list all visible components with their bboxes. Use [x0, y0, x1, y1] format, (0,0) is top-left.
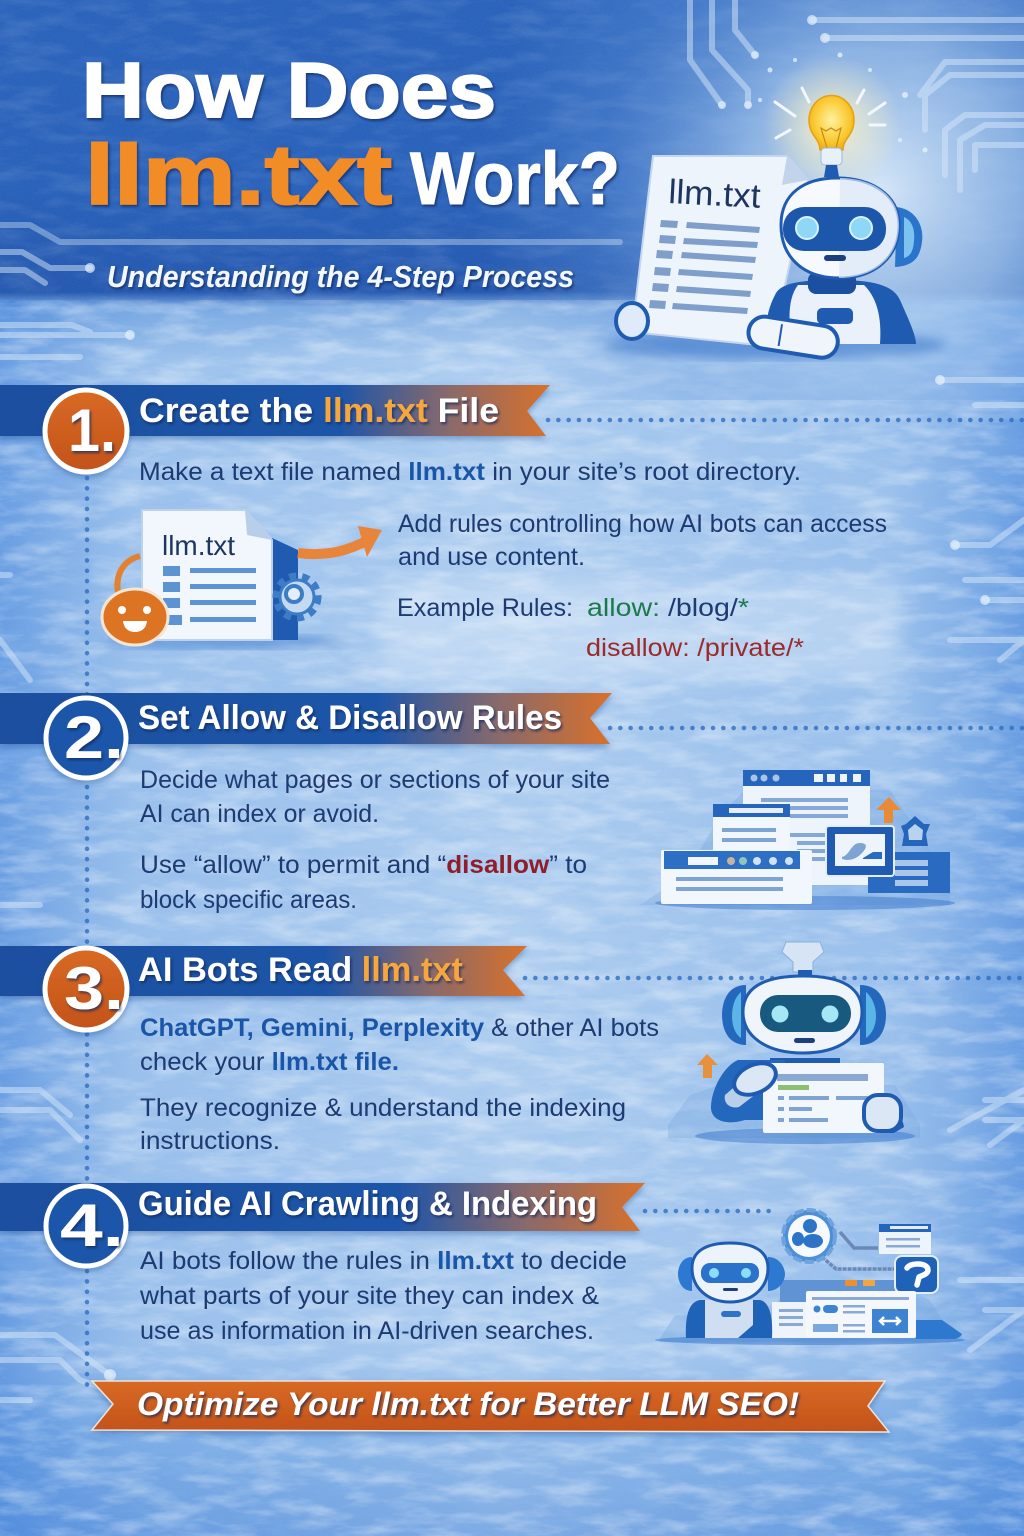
hero illustration: robot with llm.txt document	[605, 52, 945, 360]
robot	[746, 178, 922, 360]
step 4: guide ai crawling and indexing	[0, 1183, 965, 1345]
document: llm.txt	[668, 173, 762, 216]
step 3: ai bots read llm.txt	[0, 942, 1024, 1155]
title: Work?	[410, 137, 620, 220]
subtitle: Understanding the 4-Step Process	[107, 259, 574, 294]
number badge 1	[45, 390, 127, 472]
example rules	[397, 594, 804, 662]
dotted connector	[645, 1209, 770, 1213]
icon: file with gear and arrows: llm.txt	[162, 530, 235, 561]
number badge 4	[46, 1186, 126, 1266]
text: step 2	[140, 766, 610, 914]
banner 4	[0, 1183, 645, 1231]
example rules: disallow: /private/*	[586, 634, 804, 662]
dotted connector	[548, 418, 1024, 422]
example rules: Example Rules:	[397, 594, 573, 622]
number badge 4: 4.	[60, 1192, 124, 1259]
number badge 3	[45, 948, 127, 1030]
text: step 2: block specific areas.	[140, 886, 357, 914]
title	[82, 46, 620, 222]
dotted connector	[525, 976, 1024, 980]
call to action banner	[92, 1381, 889, 1432]
title: llm.txt	[85, 128, 392, 222]
text: step 2: AI can index or avoid.	[140, 800, 379, 828]
example rules: allow: /blog/ *	[587, 594, 749, 622]
call to action banner: Optimize Your llm.txt for Better LLM SEO!	[137, 1386, 799, 1422]
number badge 2	[46, 698, 126, 778]
text: rules: Add rules controlling how AI bots can access	[398, 510, 887, 538]
banner 1	[0, 385, 550, 436]
banner 3: AI Bots Read llm.txt	[138, 951, 463, 989]
illustration: robot with connected nodes	[655, 1210, 965, 1345]
illustration: robot reading file	[668, 942, 920, 1144]
document	[616, 156, 808, 345]
text: intro: Make a text file named llm.txt in your site’s root directory.	[139, 458, 801, 486]
text: step 3	[140, 1014, 659, 1155]
text: step 3: check your llm.txt file.	[140, 1048, 399, 1076]
dotted connector	[610, 726, 1024, 730]
text: step 4: what parts of your site they can index &	[139, 1282, 599, 1310]
text: step 4: use as information in AI-driven searches.	[140, 1317, 594, 1345]
number badge 1: 1.	[68, 397, 116, 464]
banner 2	[0, 693, 612, 744]
step 1: create the llm.txt file	[0, 385, 1024, 662]
number badge 3: 3.	[64, 955, 124, 1022]
illustration: browser windows	[640, 770, 955, 910]
banner 1: Create the llm.txt File	[139, 392, 499, 430]
number badge 2: 2.	[64, 704, 124, 771]
text: rules	[398, 510, 887, 571]
text: step 2: Use “allow” to permit and “ disallow” to	[140, 851, 587, 879]
step 2: set allow and disallow rules	[0, 693, 1024, 914]
text: step 2: Decide what pages or sections of your site	[140, 766, 610, 794]
text: step 4	[139, 1247, 627, 1345]
banner 4: Guide AI Crawling & Indexing	[138, 1185, 597, 1223]
text: rules: and use content.	[398, 543, 585, 571]
icon: file with gear and arrows	[102, 510, 382, 649]
text: step 3: instructions.	[140, 1127, 280, 1155]
vertical dotted timeline	[85, 478, 89, 1385]
banner 3	[0, 946, 527, 996]
text: step 3: They recognize & understand the indexing	[140, 1094, 626, 1122]
title: How Does	[82, 46, 496, 134]
banner 2: Set Allow & Disallow Rules	[138, 699, 562, 737]
text: step 4: AI bots follow the rules in llm.txt to decide	[140, 1247, 627, 1275]
icon: light bulb	[775, 88, 885, 177]
text: step 3: ChatGPT, Gemini, Perplexity & other AI bots	[140, 1014, 659, 1042]
